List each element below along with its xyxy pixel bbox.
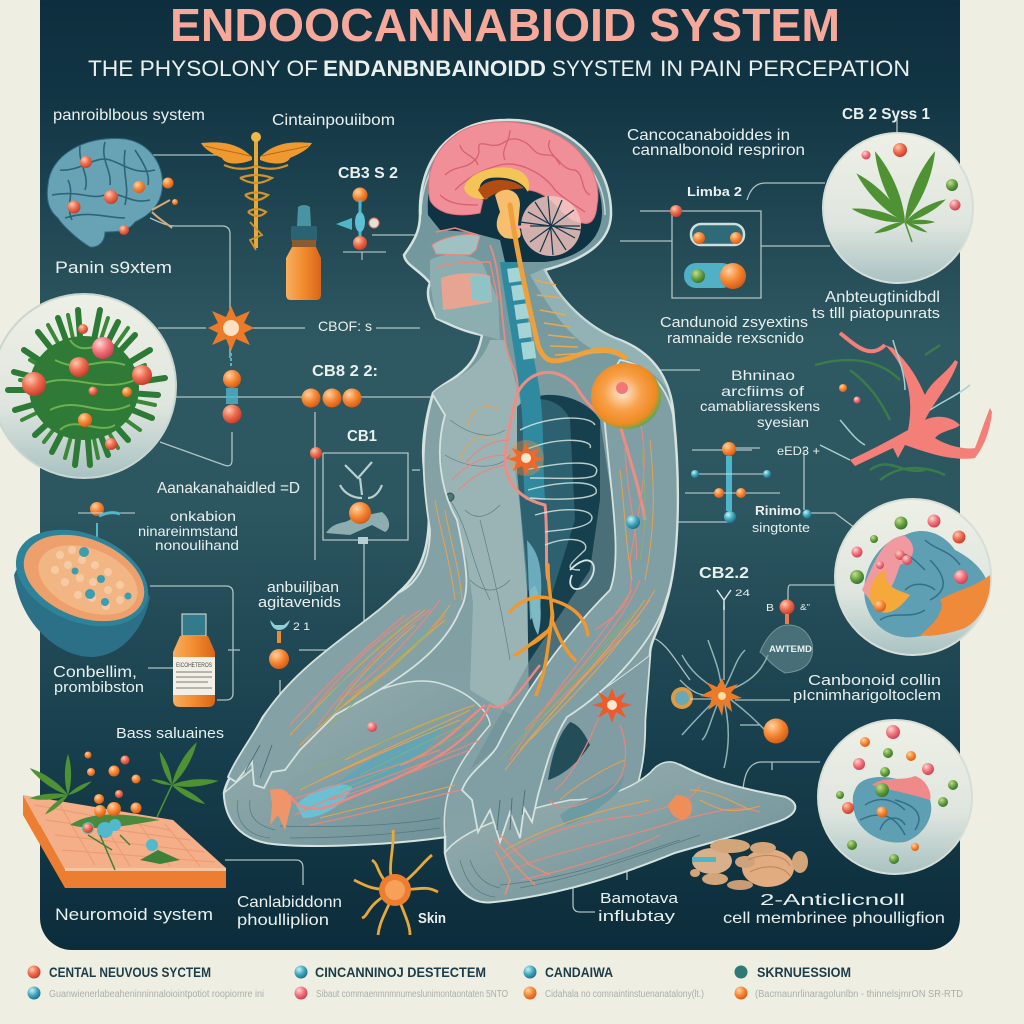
abdomen dark cavity: [517, 395, 620, 715]
nasal cavity: [432, 234, 480, 255]
capsule box contents: [670, 205, 746, 289]
legend item: central nervous system: [28, 964, 264, 1000]
subtitle: [88, 56, 910, 81]
labels: right column: [598, 106, 945, 927]
shoulder translucent right: [470, 420, 620, 770]
labels: right column: Candunoid zsyextins: [660, 314, 808, 331]
labels: right column: eED3 +: [777, 444, 820, 458]
spinal vertebrae column: [500, 262, 545, 500]
legend item: skrnuessiom: (Bacmaunrlinaragolunlbn - thinnelsjmrON SR-RTD: [755, 989, 963, 1000]
labels: right column: Canbonoid collin: [808, 672, 941, 689]
CB1 dot: [310, 447, 322, 459]
icon: labelled medicine bottle: EICOHETEROS: [176, 662, 213, 669]
labels: left column: anbuiljban: [267, 579, 339, 596]
small red node: [780, 600, 794, 624]
lower leg and foot: [445, 762, 795, 902]
icon: pills cluster: [690, 839, 808, 890]
three CB nodes: [302, 388, 362, 408]
legend item: cancannino destectem: CINCANNINOJ DESTECTEM: [315, 964, 486, 980]
body silhouette base: [224, 120, 795, 902]
thigh right hip: [525, 655, 650, 830]
labels: right column: Anbteugtinidbdl: [825, 289, 940, 306]
pain star on chest: [508, 440, 544, 476]
labels: left column: Panin s9xtem: [55, 258, 172, 277]
labels: left column: Skin: [418, 910, 446, 927]
labels: right column: CB2.2: [699, 565, 749, 582]
arm blue node: [626, 515, 640, 529]
labels: right column: Limba 2: [687, 184, 742, 199]
panel: cannabis leaf circle: [823, 133, 973, 283]
labels: left column: onkabion: [170, 508, 236, 524]
labels: left column: Conbellim,: [53, 664, 137, 681]
labels: left column: CBOF: s: [318, 318, 372, 334]
icon: tissue bowl: [2, 511, 162, 657]
labels: right column: camabliaresskens: [700, 398, 820, 414]
molecule CB3: [336, 188, 386, 260]
labels: right column: Rinimo: [755, 503, 801, 518]
icon: yellow neuron sun: [354, 830, 438, 935]
labels: right column: 2-Anticlicnoll: [760, 892, 905, 909]
right arm: [462, 360, 678, 842]
panel: blue organ circle: [835, 499, 991, 655]
icon: skin tissue block: [23, 740, 226, 888]
panel: lower organ circle: [818, 720, 972, 874]
small thigh node: [367, 722, 377, 732]
legend item: central nervous system: Guanwienerlabeaheninninnaloiointpotiot roopiomre ini: [49, 989, 264, 1000]
pain star on thigh: [592, 688, 632, 723]
labels: left column: 2 1: [293, 621, 310, 633]
labels: left column: Canlabiddonn: [237, 894, 342, 911]
labels: left column: [53, 107, 446, 929]
dark gap: [548, 722, 590, 780]
head cavity: [428, 128, 602, 262]
icon: neuron star burst: [671, 640, 768, 768]
torso side nerves: [435, 407, 500, 600]
legend: [28, 964, 963, 1000]
labels: left column: panroiblbous system: [53, 107, 205, 124]
labels: right column: Bhninao: [731, 367, 795, 383]
labels: left column: CB3 S 2: [338, 165, 398, 182]
panel: round plant circle: [0, 294, 176, 478]
labels: right column: Cancocanaboiddes in: [627, 127, 790, 144]
lower rib coil: [570, 560, 594, 589]
legend item: skrnuessiom: SKRNUESSIOM: [757, 964, 851, 980]
labels: left column: CB8 2 2:: [312, 363, 378, 380]
labels: right column: arcfiims of: [721, 383, 804, 399]
labels: right column: CB 2 Syss 1: [842, 106, 930, 123]
subtitle: IN PAIN PERCEPATION: [660, 56, 910, 81]
knee contour lines: [237, 800, 700, 897]
labels: left column: prombibston: [54, 679, 144, 696]
icon: orange star: [208, 306, 254, 351]
labels: right column: cell membrinee phoulligfion: [723, 910, 945, 927]
labels: left column: Neuromoid system: [55, 905, 213, 924]
labels: left column: phoulliplion: [237, 912, 329, 929]
Y receptor: [717, 590, 731, 610]
shoulder orb: [591, 363, 661, 429]
labels: right column: ramnaide rexscnido: [667, 330, 804, 347]
icon: blue brain: [47, 138, 178, 247]
corpus callosum: [464, 167, 529, 199]
lung and organ blue patches: [335, 722, 445, 794]
molecule below text: [269, 620, 290, 669]
legend item: cancannino destectem: Sibaut commaenmnmnumeslunimontaontaten 5NTO: [316, 989, 508, 1000]
molecule column: [222, 353, 242, 424]
CB1 receptor icon: [326, 462, 389, 544]
legend item: candaiwa: CANDAIWA: [545, 964, 613, 980]
brain stem bulb: [495, 190, 521, 239]
labels: left column: Bass saluaines: [116, 725, 224, 742]
legend item: candaiwa: Cidahala no comnaintinstuenanatalony(lt.): [545, 989, 704, 1000]
thigh left: [224, 681, 490, 846]
icon: caduceus: [201, 132, 312, 250]
orange ball node: [764, 718, 788, 744]
small cannabis leaf right: [150, 740, 219, 817]
subtitle: THE PHYSOLONY OF: [88, 56, 318, 81]
labels: right column: singtonte: [752, 520, 810, 535]
legend item: central nervous system: CENTAL NEUVOUS SYCTEM: [49, 964, 211, 980]
flask with AWTEMD: AWTEMD: [769, 644, 813, 654]
abdominal orange nerve tree: [510, 565, 588, 695]
labels: right column: 24: [735, 588, 750, 598]
nipple: [446, 493, 454, 501]
labels: left column: Cintainpouiibom: [272, 112, 395, 129]
lower head shading: [430, 254, 500, 340]
pink trunk arteries: [490, 245, 518, 395]
labels: left column: ninareinmstand: [138, 523, 238, 539]
thalamus core: [478, 180, 524, 200]
arm nerves: [290, 600, 445, 725]
rib arcs: [520, 418, 597, 570]
labels: left column: CB1: [347, 428, 377, 445]
spinal cord orange: [510, 205, 625, 361]
brain: [429, 122, 598, 223]
labels: right column: cannalbonoid respriron: [632, 142, 805, 159]
upper back neck translucent: [530, 268, 668, 390]
left molecule above bowl: [78, 502, 135, 537]
labels: right column: ts tlll piatopunrats: [812, 305, 940, 322]
legend item: cancannino destectem: [294, 964, 508, 1000]
labels: right column: pIcnimharigoltoclem: [793, 687, 941, 704]
spinal nerves: [535, 280, 608, 355]
limb pink arteries: [290, 665, 540, 809]
labels: right column: &": [800, 603, 810, 612]
labels: right column: syesian: [757, 414, 809, 430]
brain folds: [440, 130, 590, 212]
small cannabis leaf left: [28, 754, 93, 816]
molecule center right: [685, 442, 812, 523]
leg nerves: [290, 740, 480, 825]
figure: human body: [224, 120, 795, 902]
labels: left column: nonoulihand: [155, 537, 239, 553]
subtitle: ENDANBNBAINOIDD: [323, 56, 546, 81]
subtitle: SYYSTEM: [552, 56, 652, 81]
icon: pink neuron: [815, 333, 992, 480]
labels: left column: agitavenids: [258, 594, 341, 611]
left arm: [228, 395, 466, 788]
labels: right column: influbtay: [598, 908, 676, 925]
labels: right column: B: [766, 603, 774, 614]
finger separations: [245, 745, 525, 830]
shoulder orb core: [616, 382, 628, 394]
legend item: skrnuessiom: [734, 964, 963, 1000]
oral cavity: [441, 273, 492, 310]
skull outer rings: [421, 122, 605, 215]
labels: right column: Bamotava: [600, 890, 679, 907]
cerebellum fan: [510, 196, 581, 256]
labels: left column: Aanakanahaidled =D: [157, 480, 300, 497]
icon: dropper bottle: [286, 205, 321, 300]
flask with AWTEMD: [760, 625, 813, 673]
legend item: candaiwa: [524, 964, 704, 1000]
icon: labelled medicine bottle: [173, 614, 215, 707]
title: ENDOOCANNABIOID SYSTEM: [170, 0, 840, 51]
chest contour lines: [445, 420, 510, 660]
knee nerve clusters: [270, 789, 291, 830]
torso chest light: [433, 340, 535, 720]
connector lines: [135, 115, 897, 912]
abdomen teal tint: [517, 399, 575, 600]
